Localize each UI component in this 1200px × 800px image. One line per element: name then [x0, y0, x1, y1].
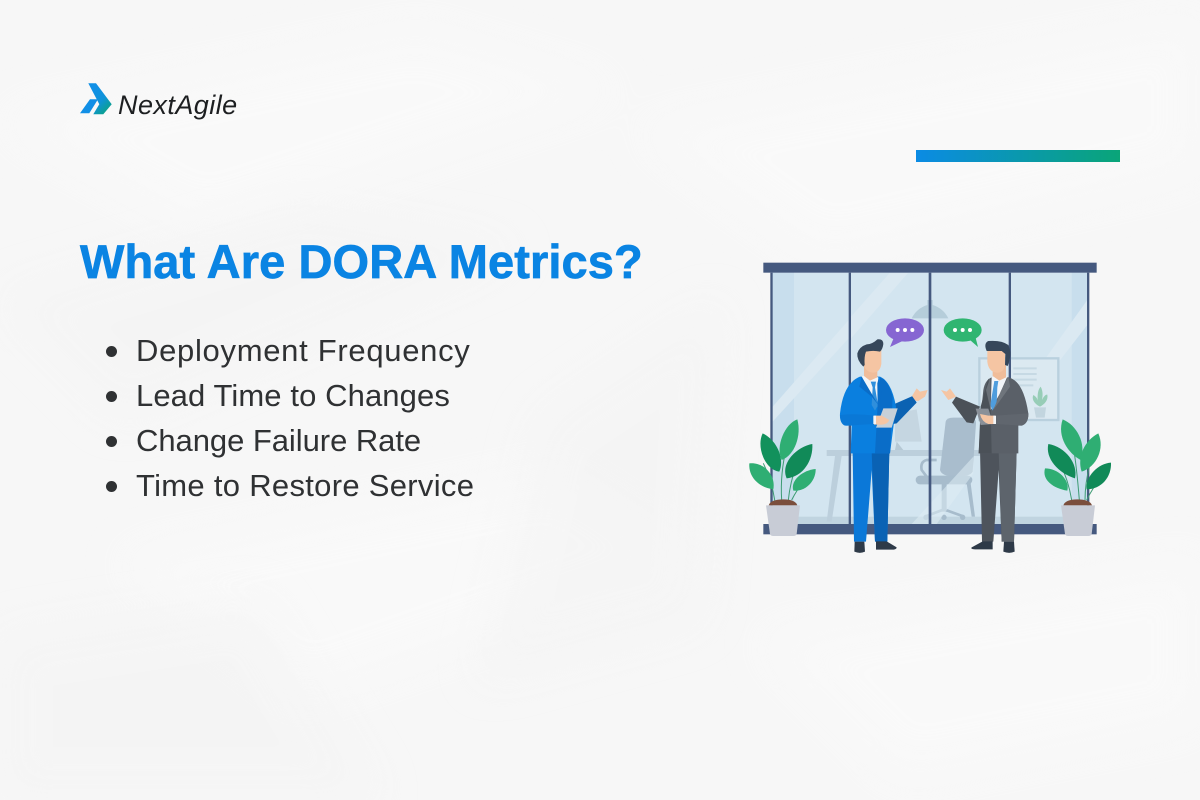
tablet and hand [876, 408, 898, 428]
neck and head [864, 365, 877, 381]
man in grey suit [941, 341, 1028, 553]
logo wordmark: NextAgile [118, 90, 238, 120]
speech bubble: green [944, 318, 982, 347]
frame bars [763, 263, 1097, 534]
illustration: two businessmen talking in front of an office window [749, 262, 1111, 553]
pot [766, 505, 800, 536]
list item 2: Lead Time to Changes [136, 378, 450, 413]
neck and head [993, 365, 1006, 381]
hand [941, 388, 956, 400]
plant in pot, right [1044, 419, 1111, 536]
shirt, tie, lapels [862, 374, 878, 407]
shirt, tie, lapels [991, 374, 1007, 410]
far arm to hand [887, 396, 917, 425]
office window [763, 263, 1097, 534]
pot [1061, 505, 1095, 536]
wall picture [979, 358, 1058, 420]
list item 1: Deployment Frequency [136, 333, 470, 368]
accent gradient bar [916, 150, 1120, 162]
logo: NextAgile [80, 83, 238, 120]
man in blue suit [840, 339, 928, 553]
near forearm [840, 414, 874, 426]
title: What Are DORA Metrics? [80, 235, 643, 288]
shoes [971, 541, 993, 549]
hair [857, 339, 883, 367]
phone and hand [976, 409, 993, 425]
icon: logo mark [80, 83, 112, 114]
hair [985, 341, 1010, 366]
jacket [979, 377, 1028, 453]
desk and monitor [827, 409, 980, 522]
lamp [912, 300, 948, 318]
far arm to hand [952, 397, 980, 423]
near forearm [996, 413, 1028, 426]
jacket [840, 377, 896, 453]
plant in pot, left [749, 419, 816, 536]
shoes [854, 542, 865, 553]
bullet list of DORA metrics [106, 333, 474, 503]
office chair [916, 418, 976, 520]
list item 3: Change Failure Rate [136, 423, 421, 458]
trousers [980, 450, 1017, 542]
list item 4: Time to Restore Service [136, 468, 474, 503]
trousers [853, 450, 889, 542]
speech bubble: purple [886, 318, 924, 347]
hand [912, 388, 928, 401]
